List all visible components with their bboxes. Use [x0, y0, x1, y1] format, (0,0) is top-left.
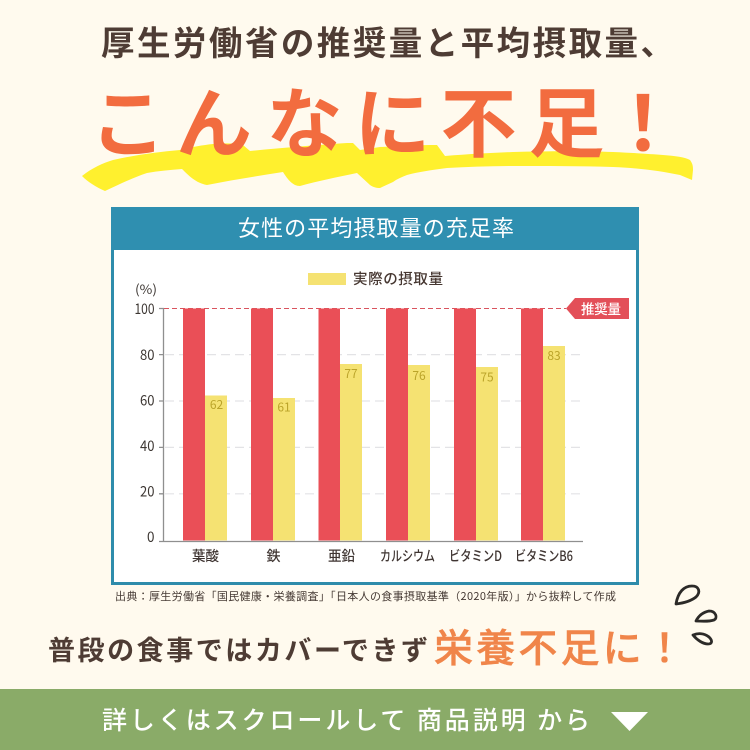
footer bar — [0, 689, 750, 750]
y axis labels: 0 — [147, 526, 154, 547]
main heading: こんなに不足！ — [90, 63, 681, 173]
x axis labels: 葉酸 — [192, 546, 219, 566]
x axis labels: 鉄 — [266, 546, 280, 566]
bar values: 61 — [277, 398, 291, 416]
panel background — [112, 208, 638, 584]
y axis labels: 80 — [140, 344, 154, 365]
y axis labels: 100 — [134, 298, 154, 319]
recommended tag: 推奨量 — [581, 298, 621, 318]
bar values: 75 — [480, 368, 494, 386]
y axis labels — [134, 279, 157, 547]
bar chart: red bars — [183, 308, 543, 540]
y axis labels: (%) — [135, 279, 157, 298]
legend: 実際の摂取量 — [353, 268, 443, 289]
y axis labels: 60 — [140, 390, 154, 410]
chart header — [111, 207, 639, 250]
summary line: 普段の食事ではカバーできず — [48, 629, 428, 668]
bar values: 76 — [412, 367, 426, 384]
yellow brush stroke — [82, 143, 693, 191]
highlight text: 栄養不足に！ — [434, 618, 684, 674]
x axis labels: ビタミンD — [449, 546, 502, 566]
x axis labels: カルシウム — [380, 546, 435, 566]
bar values — [210, 347, 561, 416]
icon: sweat drops — [676, 586, 716, 644]
footer bar: 詳しくはスクロールして 商品説明 から — [102, 701, 590, 737]
chart header: 女性の平均摂取量の充足率 — [238, 211, 514, 243]
panel: chart — [111, 207, 639, 584]
recommended tag — [566, 298, 629, 319]
x axis labels: 亜鉛 — [328, 546, 355, 566]
y axis labels: 20 — [140, 480, 154, 502]
bar chart: yellow bars — [205, 346, 565, 540]
legend — [308, 268, 443, 289]
bar values: 77 — [344, 365, 358, 382]
bar values: 83 — [547, 347, 561, 364]
source note: 出典：厚生労働省「国民健康・栄養調査」「日本人の食事摂取基準（2020年版）」から抜粋して作成 — [115, 588, 616, 604]
y axis labels: 40 — [140, 435, 154, 456]
recommended line — [164, 308, 566, 310]
icon: down arrow — [611, 712, 648, 731]
bar values: 62 — [210, 396, 223, 413]
x axis labels — [192, 546, 573, 566]
heading: intro line: 厚生労働省の推奨量と平均摂取量、 — [101, 16, 674, 65]
x axis labels: ビタミンB6 — [515, 546, 573, 566]
